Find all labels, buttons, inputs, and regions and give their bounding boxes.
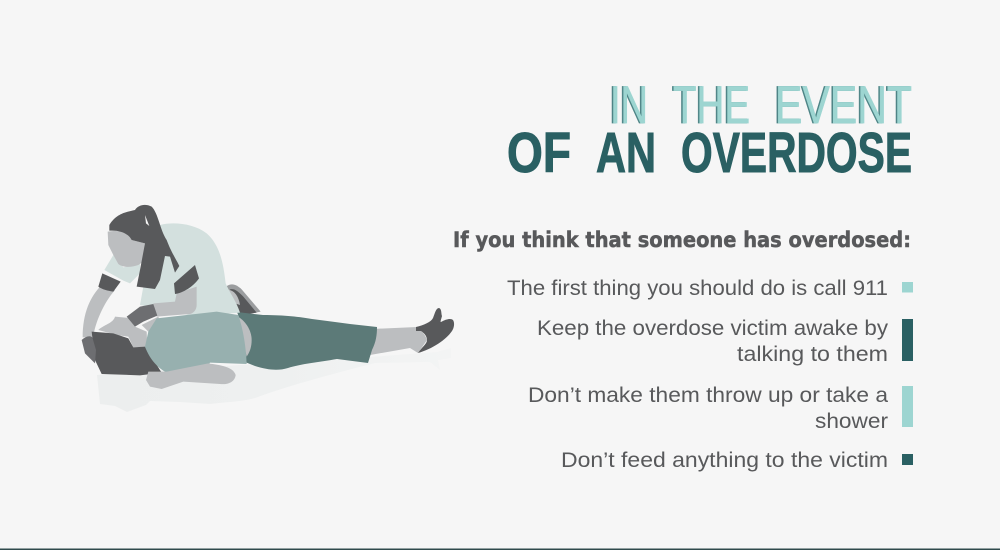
helper's back foot: [226, 284, 261, 316]
victim's lower arm: [146, 363, 236, 389]
marker: [902, 454, 913, 465]
helper's face: [108, 231, 145, 267]
helper's hand: [127, 304, 157, 327]
list item: don't make them throw up: [528, 384, 913, 433]
subheading: If you think that someone has overdosed:: [453, 228, 911, 252]
marker: [902, 386, 913, 427]
helper's sleeve bands: [98, 273, 121, 292]
helper's hair: [109, 205, 179, 289]
title line one: shadow: [608, 76, 910, 135]
list item: keep awake: Keep the overdose victim awake by: [537, 317, 889, 340]
list item: keep awake: talking to them: [737, 343, 888, 366]
victim's face and arm: [98, 317, 147, 347]
title line one: shadow: EVENT: [774, 76, 910, 135]
title line one: EVENT: [775, 76, 912, 135]
helper and victim upper body: [82, 205, 252, 389]
title line two: OF: [507, 121, 571, 185]
title line one: IN: [610, 76, 648, 135]
helper's other hand: [82, 336, 96, 363]
marker: [902, 282, 913, 292]
list item: keep awake: [537, 317, 913, 366]
list item: don't make them throw up: shower: [815, 410, 888, 433]
helper's arms: [83, 285, 115, 337]
title line one: [610, 76, 912, 135]
marker: [902, 319, 913, 361]
list item: call 911: The first thing you should do is call 911: [507, 277, 888, 300]
title line two: OVERDOSE: [681, 121, 912, 185]
helper's shirt: [140, 223, 240, 316]
victim's shirt: [145, 312, 247, 373]
victim's hip skin: [237, 316, 252, 357]
list item: don't feed: Don’t feed anything to the victim: [561, 449, 888, 472]
title line one: THE: [673, 76, 750, 135]
victim's hair: [92, 332, 162, 375]
victim's trousers: [237, 312, 377, 370]
title line one: shadow: IN: [608, 76, 646, 135]
illustration: person helping an overdose victim: [82, 205, 454, 412]
floor shadow: [97, 348, 451, 412]
victim's lower leg: [370, 327, 427, 355]
title: [507, 76, 912, 185]
title line one: shadow: THE: [672, 76, 748, 135]
list item: don't make them throw up: Don’t make them throw up or take a: [528, 384, 888, 407]
title line two: AN: [596, 121, 656, 185]
victim's boot: [416, 308, 454, 353]
title line two: [507, 121, 912, 185]
